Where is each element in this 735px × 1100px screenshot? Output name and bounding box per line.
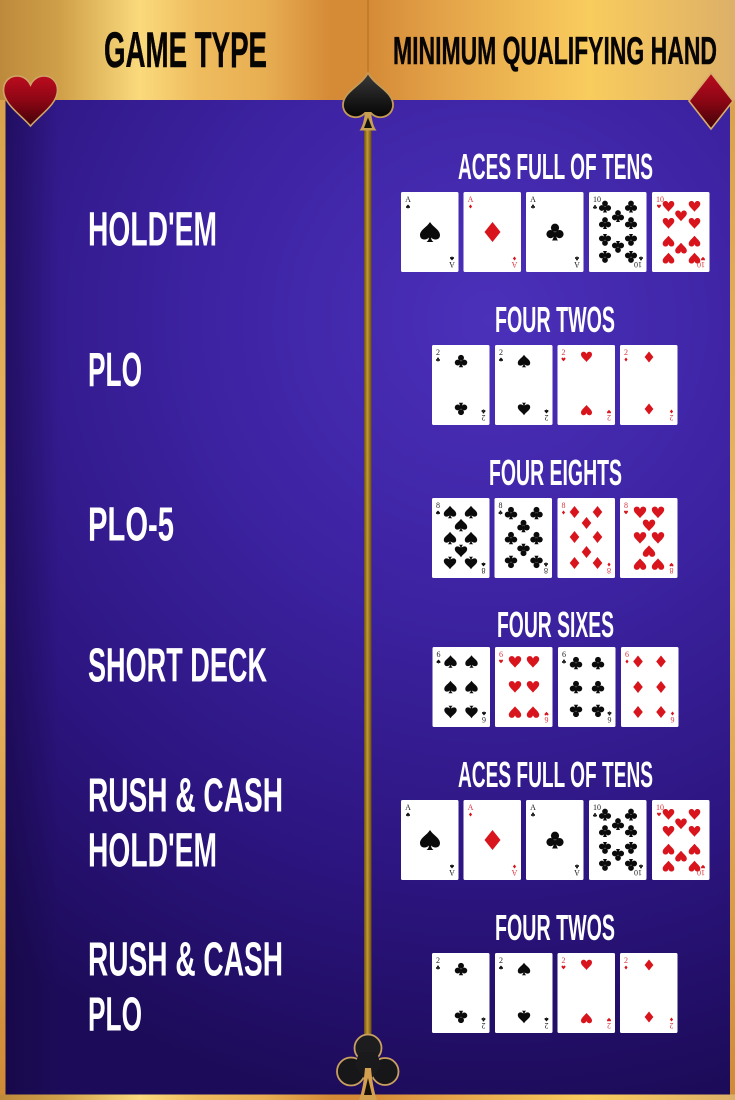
hand title: four sixes: FOUR SIXES bbox=[497, 604, 614, 645]
cards: aces full of tens: A bbox=[449, 260, 455, 269]
cards: four twos (rush and cash): 2 bbox=[670, 1021, 674, 1030]
cards: aces full of tens: A bbox=[511, 260, 517, 269]
cards: four sixes: 6 bbox=[482, 715, 486, 724]
cards: four eights: 8 bbox=[498, 501, 502, 510]
cards: four twos: 2 bbox=[482, 413, 486, 422]
label: PLO: PLO bbox=[88, 344, 142, 397]
cards: aces full of tens (rush and cash): 10 bbox=[634, 868, 642, 877]
cards: aces full of tens (rush and cash): 10 bbox=[697, 868, 705, 877]
cards: four twos: 2 bbox=[624, 348, 628, 357]
cards: aces full of tens (rush and cash): 10 bbox=[593, 803, 601, 812]
cards: four sixes: 6 bbox=[562, 650, 566, 659]
cards: aces full of tens: 10 bbox=[593, 195, 601, 204]
cards: four twos (rush and cash): 2 bbox=[499, 956, 503, 965]
label: Hold'em: HOLD'EM bbox=[88, 204, 217, 256]
cards: four twos (rush and cash): 2 bbox=[544, 1021, 548, 1030]
cards: aces full of tens bbox=[401, 192, 710, 272]
cards: four twos bbox=[432, 345, 678, 425]
cards: four eights: 8 bbox=[670, 566, 674, 575]
gold frame left bbox=[0, 95, 6, 1100]
cards: aces full of tens: 10 bbox=[656, 195, 664, 204]
hand title: four eights: FOUR EIGHTS bbox=[489, 452, 622, 493]
label: Short Deck: SHORT DECK bbox=[88, 640, 267, 692]
label: Rush & Cash PLO: PLO bbox=[88, 988, 142, 1042]
cards: aces full of tens (rush and cash): A bbox=[405, 803, 411, 812]
cards: four eights: 8 bbox=[562, 501, 566, 510]
cards: four twos (rush and cash) bbox=[432, 953, 678, 1033]
cards: aces full of tens (rush and cash) bbox=[401, 800, 710, 880]
cards: four twos: 2 bbox=[607, 413, 611, 422]
cards: aces full of tens (rush and cash): 10 bbox=[656, 803, 664, 812]
icon: spade bbox=[343, 73, 393, 130]
cards: four twos (rush and cash): 2 bbox=[562, 956, 566, 965]
cards: aces full of tens: A bbox=[574, 260, 580, 269]
center divider pole bbox=[364, 125, 372, 1040]
label: Rush & Cash Hold'em: HOLD'EM bbox=[88, 824, 217, 878]
cards: four twos (rush and cash): 2 bbox=[482, 1021, 486, 1030]
cards: aces full of tens: 10 bbox=[634, 260, 642, 269]
cards: four twos (rush and cash): 2 bbox=[607, 1021, 611, 1030]
label: Rush & Cash PLO: RUSH & CASH bbox=[88, 934, 283, 986]
cards: aces full of tens: A bbox=[530, 195, 536, 204]
cards: four twos: 2 bbox=[436, 348, 440, 357]
gold frame bottom bbox=[0, 1094, 735, 1100]
icon: heart bbox=[4, 76, 58, 126]
label: PLO-5: PLO-5 bbox=[88, 498, 174, 552]
gold frame right bbox=[730, 95, 735, 1100]
cards: four twos: 2 bbox=[499, 348, 503, 357]
cards: four twos: 2 bbox=[670, 413, 674, 422]
cards: four eights: 8 bbox=[624, 501, 628, 510]
cards: four twos: 2 bbox=[562, 348, 566, 357]
cards: four eights: 8 bbox=[436, 501, 440, 510]
cards: four sixes: 6 bbox=[436, 650, 440, 659]
icon: diamond bbox=[689, 73, 733, 129]
hand title: four twos (rush and cash): FOUR TWOS bbox=[495, 907, 615, 948]
cards: four sixes bbox=[432, 647, 678, 727]
cards: four eights: 8 bbox=[607, 566, 611, 575]
cards: aces full of tens (rush and cash): A bbox=[574, 868, 580, 877]
icon: club bbox=[337, 1034, 398, 1100]
hand title: four twos: FOUR TWOS bbox=[495, 299, 615, 340]
heading: game type: GAME TYPE bbox=[104, 22, 267, 78]
header band bbox=[0, 0, 735, 100]
cards: four sixes: 6 bbox=[608, 715, 612, 724]
cards: four twos (rush and cash): 2 bbox=[624, 956, 628, 965]
cards: four eights: 8 bbox=[544, 566, 548, 575]
cards: four sixes: 6 bbox=[499, 650, 503, 659]
cards: four sixes: 6 bbox=[625, 650, 629, 659]
cards: aces full of tens (rush and cash): A bbox=[468, 803, 474, 812]
cards: four twos (rush and cash): 2 bbox=[436, 956, 440, 965]
label: Rush & Cash PLO bbox=[88, 934, 283, 1042]
cards: four sixes: 6 bbox=[670, 715, 674, 724]
cards: aces full of tens: 10 bbox=[697, 260, 705, 269]
cards: four eights: 8 bbox=[482, 566, 486, 575]
label: Rush & Cash Hold'em: RUSH & CASH bbox=[88, 770, 283, 822]
cards: aces full of tens (rush and cash): A bbox=[511, 868, 517, 877]
cards: four twos: 2 bbox=[544, 413, 548, 422]
cards: aces full of tens (rush and cash): A bbox=[449, 868, 455, 877]
cards: aces full of tens (rush and cash): A bbox=[530, 803, 536, 812]
cards: aces full of tens: A bbox=[405, 195, 411, 204]
cards: four sixes: 6 bbox=[544, 715, 548, 724]
label: Rush & Cash Hold'em bbox=[88, 770, 283, 878]
cards: aces full of tens: A bbox=[468, 195, 474, 204]
cards: four eights bbox=[432, 498, 678, 578]
